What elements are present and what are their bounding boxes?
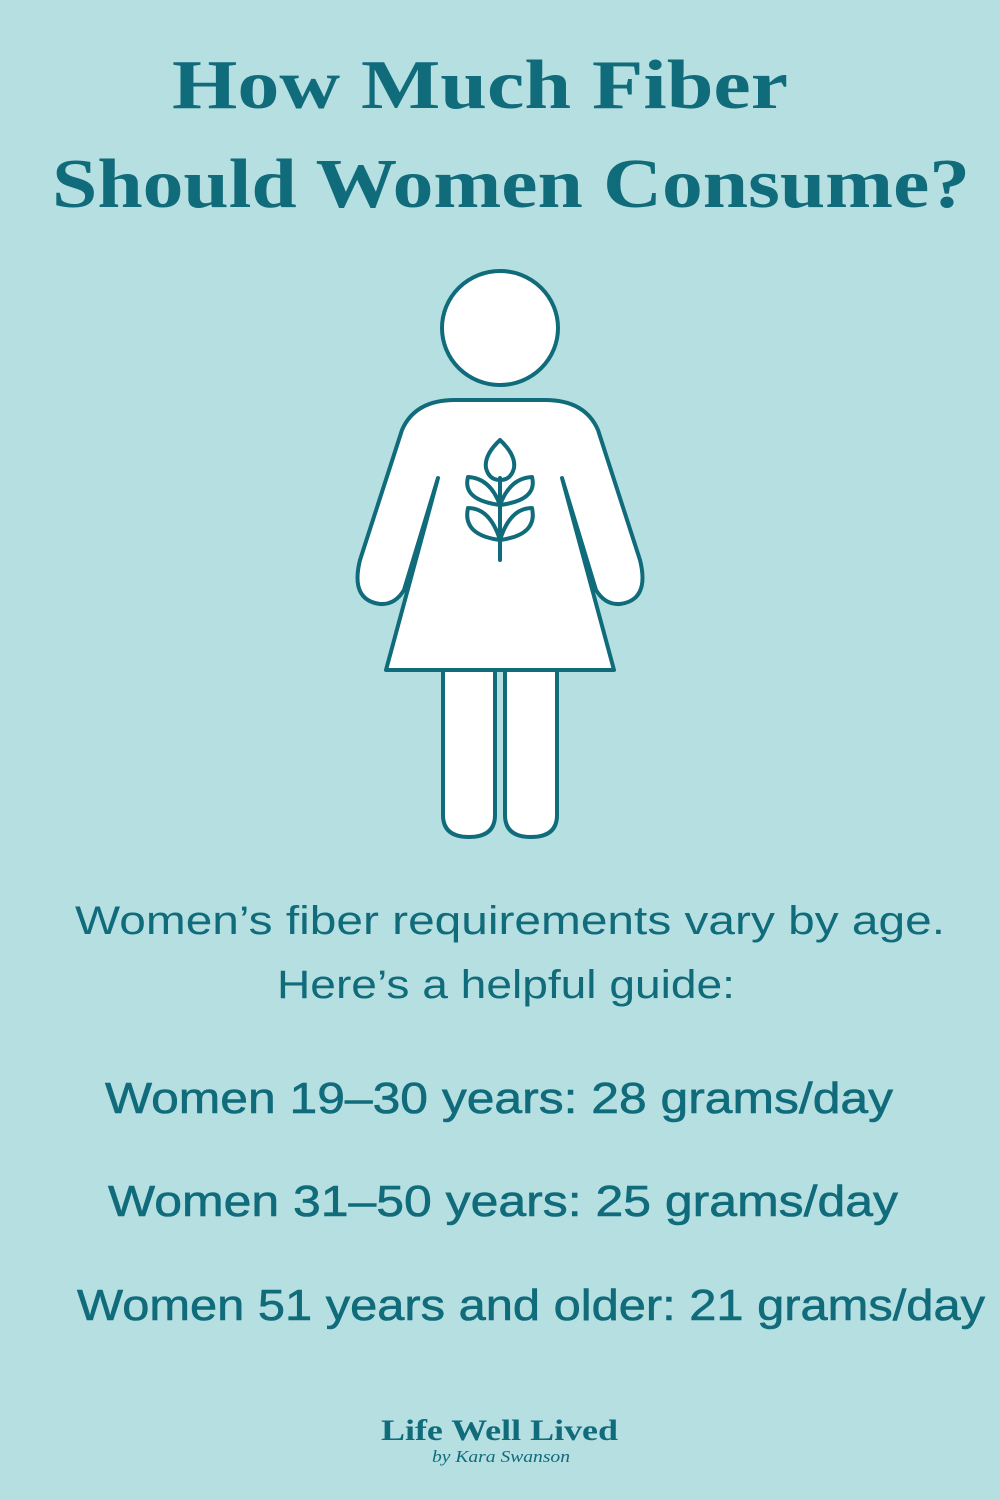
item 19-30: Women 19–30 years: 28 grams/day [105, 1074, 893, 1123]
head [442, 271, 558, 385]
logo: Life Well Lived [381, 1414, 618, 1447]
body dress [358, 400, 642, 670]
fiber requirement list [77, 1074, 985, 1330]
logo [381, 1414, 618, 1466]
icon: woman figure with wheat [358, 271, 642, 837]
legs [443, 670, 495, 837]
item 51+: Women 51 years and older: 21 grams/day [77, 1281, 985, 1330]
intro text: Here’s a helpful guide: [277, 963, 735, 1007]
intro text: Women’s fiber requirements vary by age. [75, 899, 945, 943]
logo: by Kara Swanson [432, 1447, 570, 1466]
item 31-50: Women 31–50 years: 25 grams/day [108, 1177, 898, 1226]
title [52, 47, 970, 223]
wheat icon [467, 440, 533, 560]
title: How Much Fiber [172, 47, 788, 124]
intro text [75, 899, 945, 1007]
title: Should Women Consume? [52, 146, 970, 223]
